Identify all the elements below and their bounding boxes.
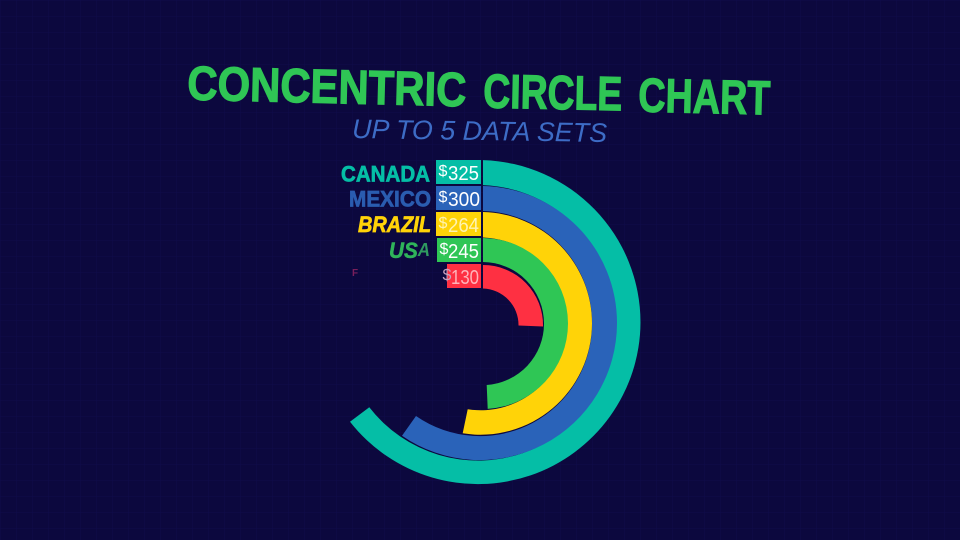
value box: Canada: 325 [448, 163, 479, 185]
title [187, 58, 771, 125]
value box: fifth series: 130 [451, 267, 479, 289]
ring: fifth series [483, 265, 543, 326]
label: Canada: CANADA [341, 162, 430, 186]
ring: Brazil [463, 212, 592, 435]
title: CIRCLE [483, 66, 623, 121]
ring: Canada [350, 160, 640, 484]
value box: fifth series [442, 264, 481, 289]
title: CHART [638, 70, 771, 125]
subtitle: UP TO 5 DATA SETS [352, 114, 607, 148]
label: fading letter: F [352, 268, 358, 279]
value box: USA: $ [440, 241, 448, 258]
label: Mexico: MEXICO [349, 186, 431, 212]
value box: Mexico [436, 186, 481, 211]
label: USA: US [389, 238, 420, 263]
ring: Mexico [402, 186, 617, 460]
title: CONCENTRIC [187, 58, 467, 117]
value box: USA: 245 [448, 241, 479, 263]
label: Brazil: BRAZIL [358, 212, 431, 237]
value box: USA [437, 238, 481, 263]
value box: Canada: $ [438, 163, 448, 180]
value box: fifth series: $ [442, 267, 452, 284]
value box: Canada [436, 160, 481, 185]
ring: USA [483, 238, 568, 409]
value box: Mexico: 300 [448, 189, 480, 211]
concentric circle chart [350, 160, 640, 484]
value box: Brazil: 264 [448, 215, 479, 237]
value box: Mexico: $ [438, 189, 448, 206]
value box: Brazil [436, 212, 481, 237]
value box: Brazil: $ [438, 215, 448, 232]
label: USA: A [417, 240, 430, 260]
